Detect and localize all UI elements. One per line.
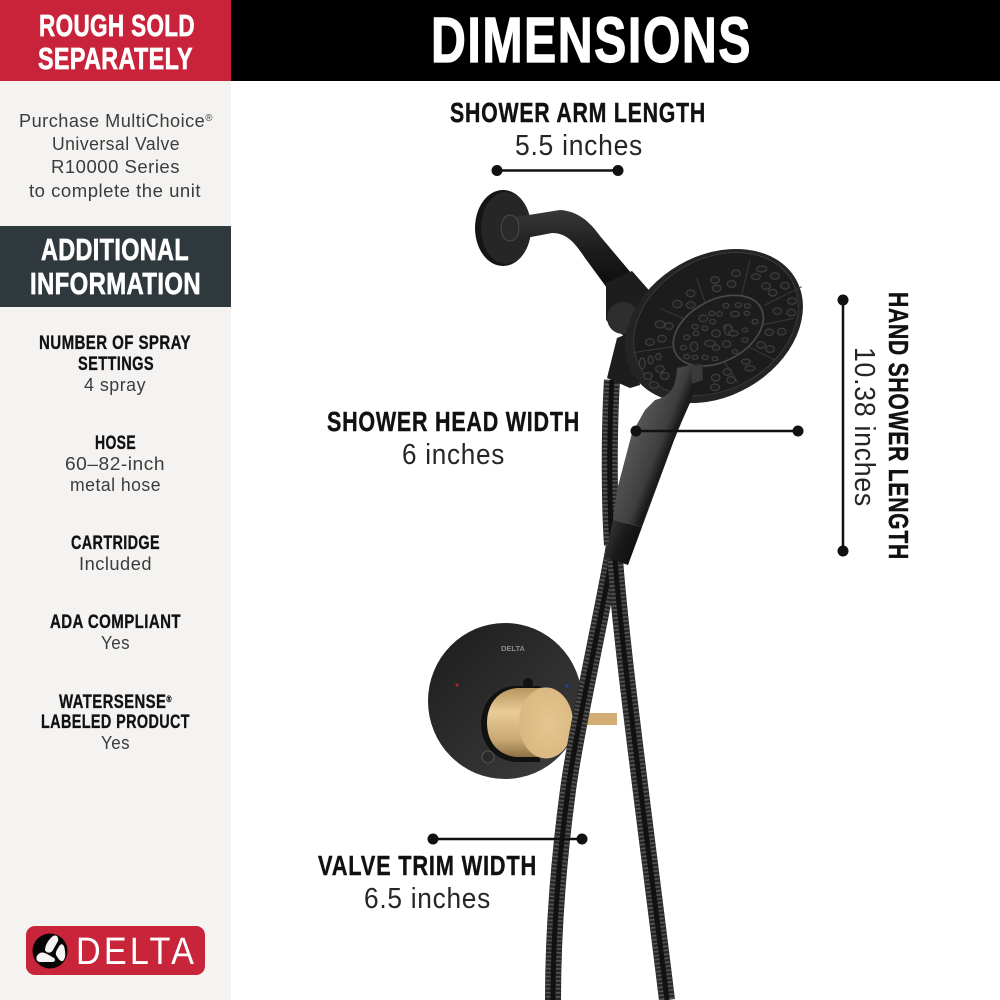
dimension: shower arm length: 5.5 inches [515, 130, 643, 162]
nozzles [639, 266, 796, 391]
dimension: shower arm length: SHOWER ARM LENGTH [450, 97, 706, 128]
spec: spray settings: NUMBER OF SPRAY [39, 333, 191, 354]
dimension: hand shower length [838, 292, 914, 560]
spec: spray settings: 4 spray [84, 374, 146, 395]
dimension: hand shower length: 10.38 inches [848, 347, 880, 507]
text block: purchase note: R10000 Series [51, 156, 180, 177]
spoke dividers [633, 260, 802, 383]
text block: purchase note: Universal Valve [52, 133, 180, 154]
spec: watersense: WATERSENSE [59, 692, 196, 713]
dimension: valve trim width: VALVE TRIM WIDTH [318, 850, 537, 881]
product: valve trim: DELTA [501, 644, 525, 653]
text block: purchase note [19, 110, 213, 201]
spec: cartridge: CARTRIDGE [71, 533, 160, 554]
banner: rough sold separately: ROUGH SOLD [39, 8, 195, 43]
logo: delta [26, 926, 205, 975]
spec: hose: 60–82-inch [65, 453, 165, 474]
text block: purchase note: Purchase MultiChoice [19, 110, 209, 131]
dimension: hand shower length: HAND SHOWER LENGTH [883, 292, 914, 560]
right background [231, 0, 1000, 1000]
heading: additional information: ADDITIONAL [41, 232, 189, 267]
spec: cartridge: Included [79, 553, 152, 574]
logo: delta: DELTA [76, 929, 195, 972]
spec: ada compliant: ADA COMPLIANT [50, 612, 181, 633]
product: hose [553, 380, 667, 1000]
text block: purchase note: ® [205, 113, 213, 124]
dimension: valve trim width [318, 834, 588, 915]
text block: purchase note: to complete the unit [29, 180, 201, 201]
dimension: shower arm length [450, 97, 706, 176]
spec: watersense: Yes [101, 732, 130, 753]
product: shower head [597, 218, 831, 434]
product: hand shower handle [605, 362, 704, 565]
heading: additional information [0, 226, 231, 307]
spec: spray settings: SETTINGS [78, 354, 154, 375]
spec: hose [65, 433, 165, 495]
spec: ada compliant: Yes [101, 632, 130, 653]
spec: watersense: ® [166, 694, 172, 704]
product: shower arm [475, 190, 654, 388]
spec: ada compliant [50, 612, 181, 653]
spec: hose: metal hose [70, 474, 161, 495]
dimension: valve trim width: 6.5 inches [364, 883, 491, 915]
spec: watersense [41, 692, 190, 753]
spec: spray settings [39, 333, 191, 395]
title banner: dimensions [231, 0, 1000, 81]
dimension: shower head width: SHOWER HEAD WIDTH [327, 406, 580, 437]
dimension: shower head width [327, 406, 804, 471]
spec: cartridge [71, 533, 160, 574]
dimension: shower head width: 6 inches [402, 439, 505, 471]
spec: hose: HOSE [95, 433, 136, 454]
heading: additional information: INFORMATION [30, 266, 201, 301]
banner: rough sold separately [0, 0, 231, 81]
title banner: dimensions: DIMENSIONS [431, 4, 752, 76]
spec: watersense: LABELED PRODUCT [41, 712, 190, 733]
banner: rough sold separately: SEPARATELY [38, 41, 193, 76]
product: valve trim [428, 623, 617, 779]
panel: left sidebar background [0, 0, 231, 1000]
